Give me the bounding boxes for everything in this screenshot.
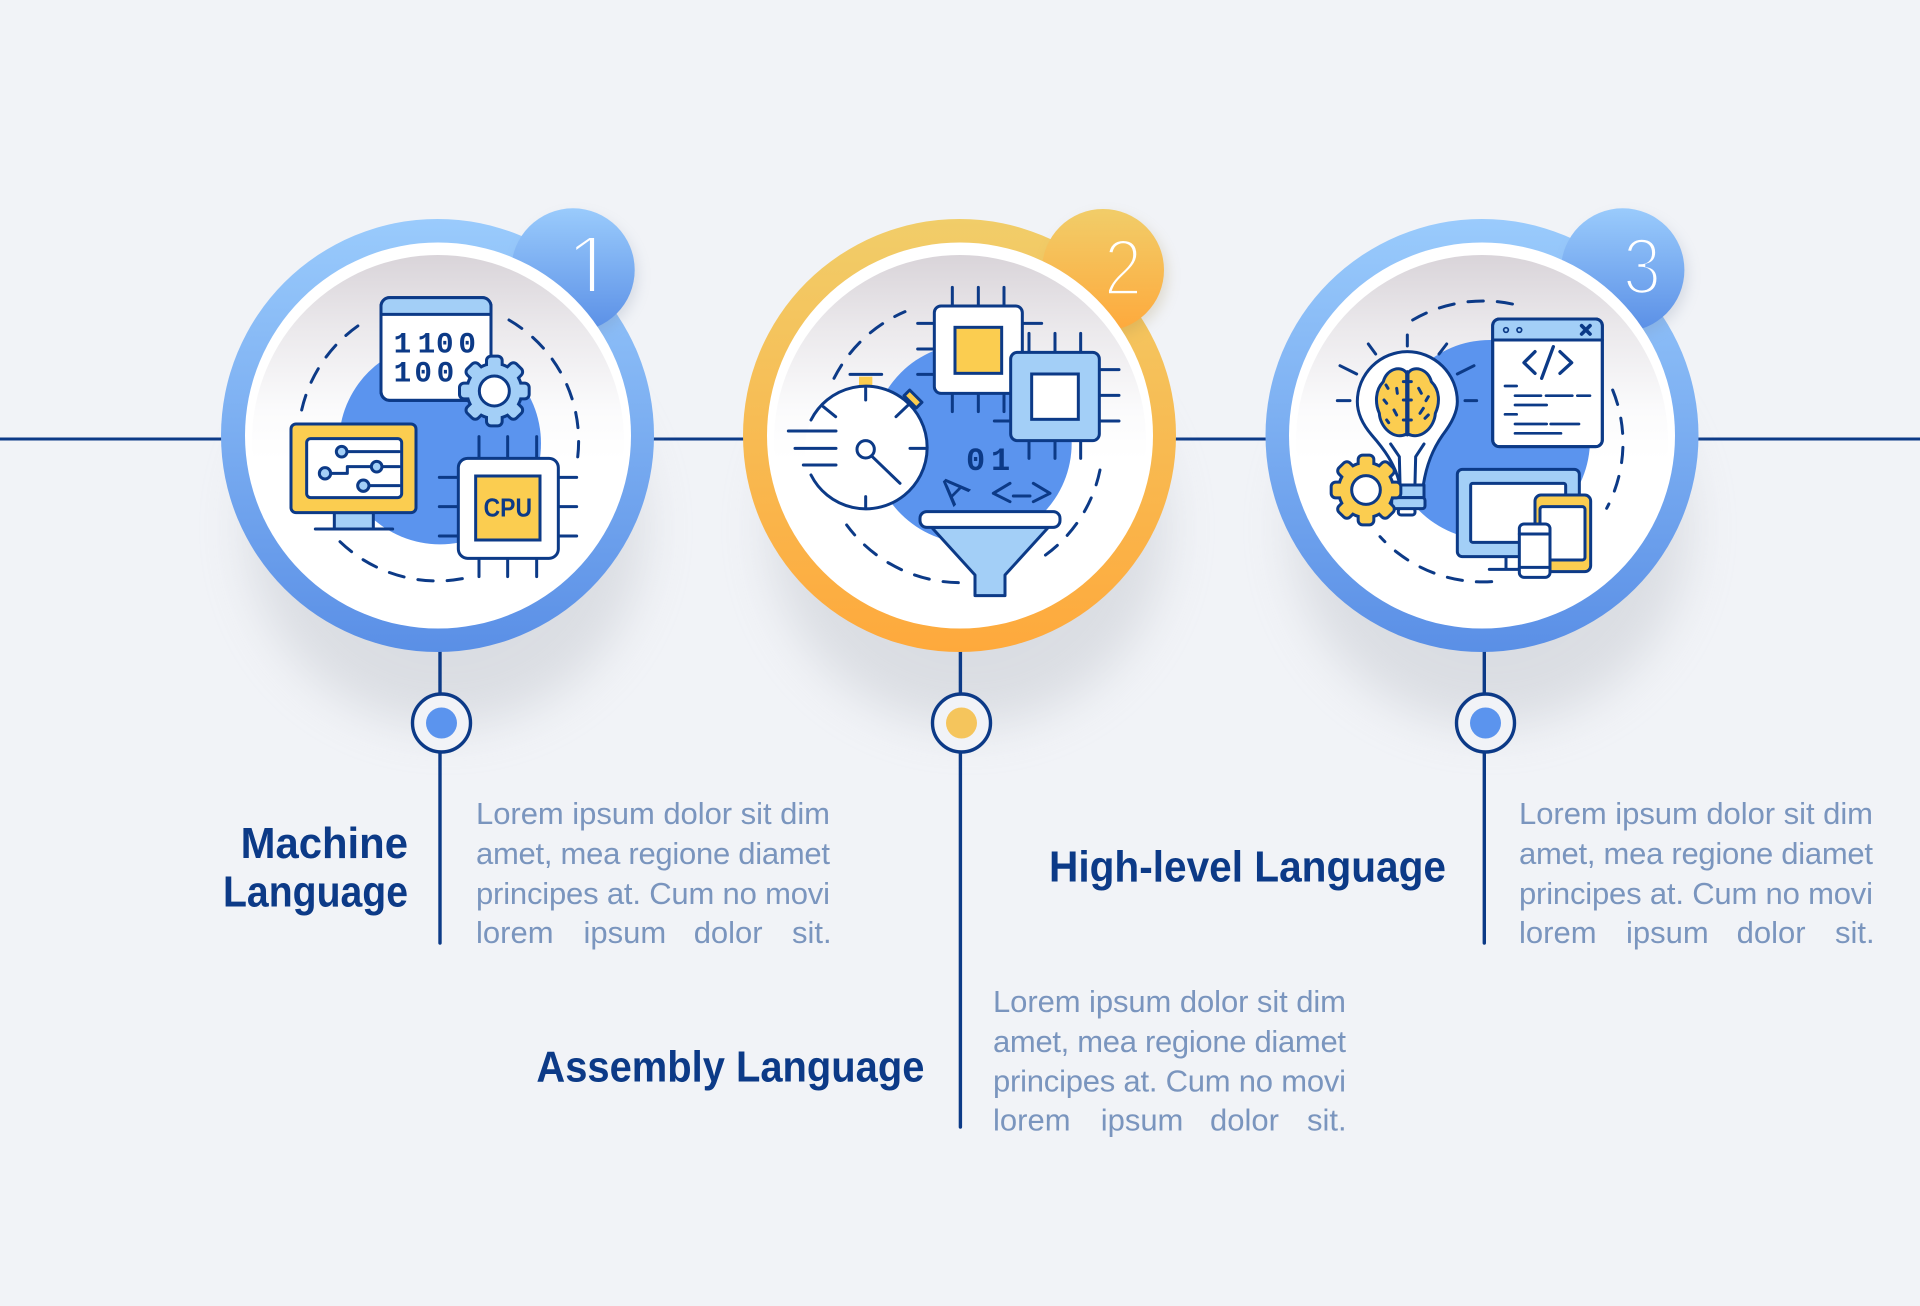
circle shadow 3 [1292,330,1688,726]
connector with marker 2 [932,650,990,1127]
ring 3 [1266,219,1698,652]
icon: yellow gear [1333,457,1399,523]
icon: assembly language [788,287,1119,596]
text block 1: dolor [694,915,763,950]
heading: Machine Language: Language [223,868,408,917]
icon: machine language [291,298,579,581]
icon: binary window: 1100 [394,329,476,362]
text block 3: ipsum [1626,915,1709,950]
number badge 3 [1561,208,1687,336]
text block 3: amet, mea regione diamet [1519,836,1873,871]
circle shadow 2 [770,330,1166,726]
number badge 1 [511,208,637,336]
icon: data symbols: A [929,465,977,513]
icon: binary window: 100 [394,358,454,391]
text block 2: sit. [1307,1103,1347,1138]
inner disc 1 [245,242,631,628]
text block 3: lorem [1519,915,1597,950]
number badge 2: 2 [1104,223,1142,312]
inner disc 3 [1289,242,1675,628]
text block 1: ipsum [584,915,666,950]
number badge 2 [1042,209,1167,336]
number badge 3: 3 [1623,222,1661,310]
icon: high-level language [1333,301,1623,582]
text block 1: lorem [476,915,554,950]
heading: High-level Language: High-level Language [1049,843,1446,892]
step 1: machine language [221,208,654,943]
icon: cpu chip: CPU [484,493,532,523]
ring 1 [221,219,654,652]
text block 2: amet, mea regione diamet [993,1024,1346,1059]
text block 1: sit. [792,915,832,950]
heading: Assembly Language: Assembly Language [536,1043,924,1092]
icon: data symbols: 01 [966,443,1010,480]
icon: devices [1457,469,1591,577]
step 2: assembly language [743,209,1176,1127]
icon: light bulb with brain [1337,335,1477,515]
icon: code window [1493,319,1602,447]
text block 2: ipsum [1101,1103,1183,1138]
number badge 1: 1 [566,217,615,316]
connector with marker 1 [412,650,470,943]
text block 2: lorem [993,1103,1071,1138]
text block 1 [476,796,832,950]
text block 3: Lorem ipsum dolor sit dim [1519,796,1873,831]
icon: funnel [920,512,1060,596]
circle shadow 1 [248,330,644,726]
text block 1: amet, mea regione diamet [476,836,830,871]
icon: binary window [381,298,491,400]
text block 2: Lorem ipsum dolor sit dim [993,984,1346,1019]
icon: cpu chip [439,437,577,577]
horizontal connector line [0,438,1920,440]
step 3: high-level language [1266,208,1698,943]
icon: yellow chip [918,287,1042,412]
icon: stopwatch [788,374,927,509]
text block 2: dolor [1210,1103,1279,1138]
icon: data symbols [929,443,1050,513]
text block 1: Lorem ipsum dolor sit dim [476,796,830,831]
icon: blue chip [994,333,1119,458]
inner disc 2 [767,242,1153,628]
icon: monitor with circuit [291,424,416,529]
text block 1: principes at. Cum no movi [476,876,830,911]
heading: Machine Language [223,819,408,917]
ring 2 [743,219,1176,652]
icon: gear [461,358,528,424]
text block 3 [1519,796,1875,950]
text block 2: principes at. Cum no movi [993,1064,1346,1099]
text block 3: sit. [1835,915,1875,950]
text block 3: principes at. Cum no movi [1519,876,1873,911]
text block 2 [993,984,1347,1138]
text block 3: dolor [1737,915,1806,950]
heading: Machine Language: Machine [241,819,408,868]
connector with marker 3 [1456,650,1514,943]
